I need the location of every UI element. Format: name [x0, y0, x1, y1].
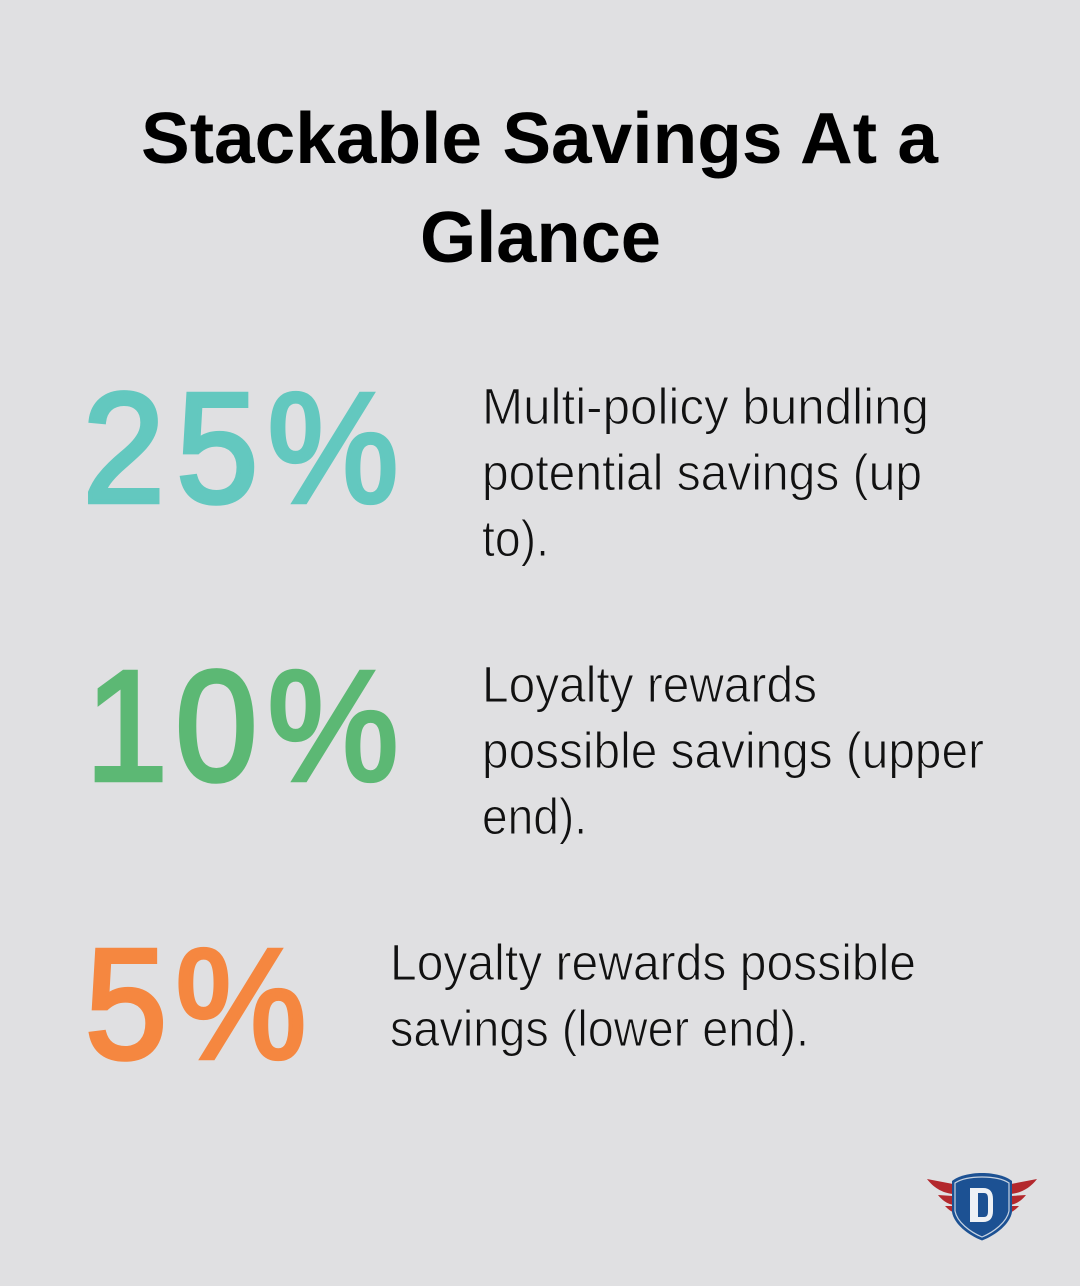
description: loyalty rewards upper end: possible savings (upper: [482, 722, 984, 779]
title: [141, 99, 939, 278]
stat row: 25% multi-policy bundling: [83, 361, 929, 567]
stat number: 25%: 25%: [83, 361, 399, 536]
icon: winged shield logo: [927, 1173, 1037, 1240]
description: multi-policy bundling: potential savings (up: [482, 444, 922, 501]
description: loyalty rewards upper end: [482, 656, 984, 845]
title: Stackable Savings At a: [141, 99, 939, 179]
stat number: 10%: 10%: [86, 639, 399, 814]
description: loyalty rewards upper end: end).: [482, 788, 587, 845]
description: loyalty rewards upper end: Loyalty rewards: [482, 656, 817, 713]
description: multi-policy bundling: [482, 378, 929, 567]
stat row: 10% loyalty rewards upper: [86, 639, 984, 845]
description: loyalty rewards lower end: savings (lower end).: [390, 1000, 809, 1057]
stat row: 5% loyalty rewards lower: [85, 917, 916, 1092]
description: multi-policy bundling: to).: [482, 510, 549, 567]
description: loyalty rewards lower end: [390, 934, 916, 1057]
description: multi-policy bundling: Multi-policy bundling: [482, 378, 929, 435]
description: loyalty rewards lower end: Loyalty rewards possible: [390, 934, 916, 991]
title: Glance: [420, 198, 661, 278]
stat number: 5%: 5%: [85, 917, 307, 1092]
